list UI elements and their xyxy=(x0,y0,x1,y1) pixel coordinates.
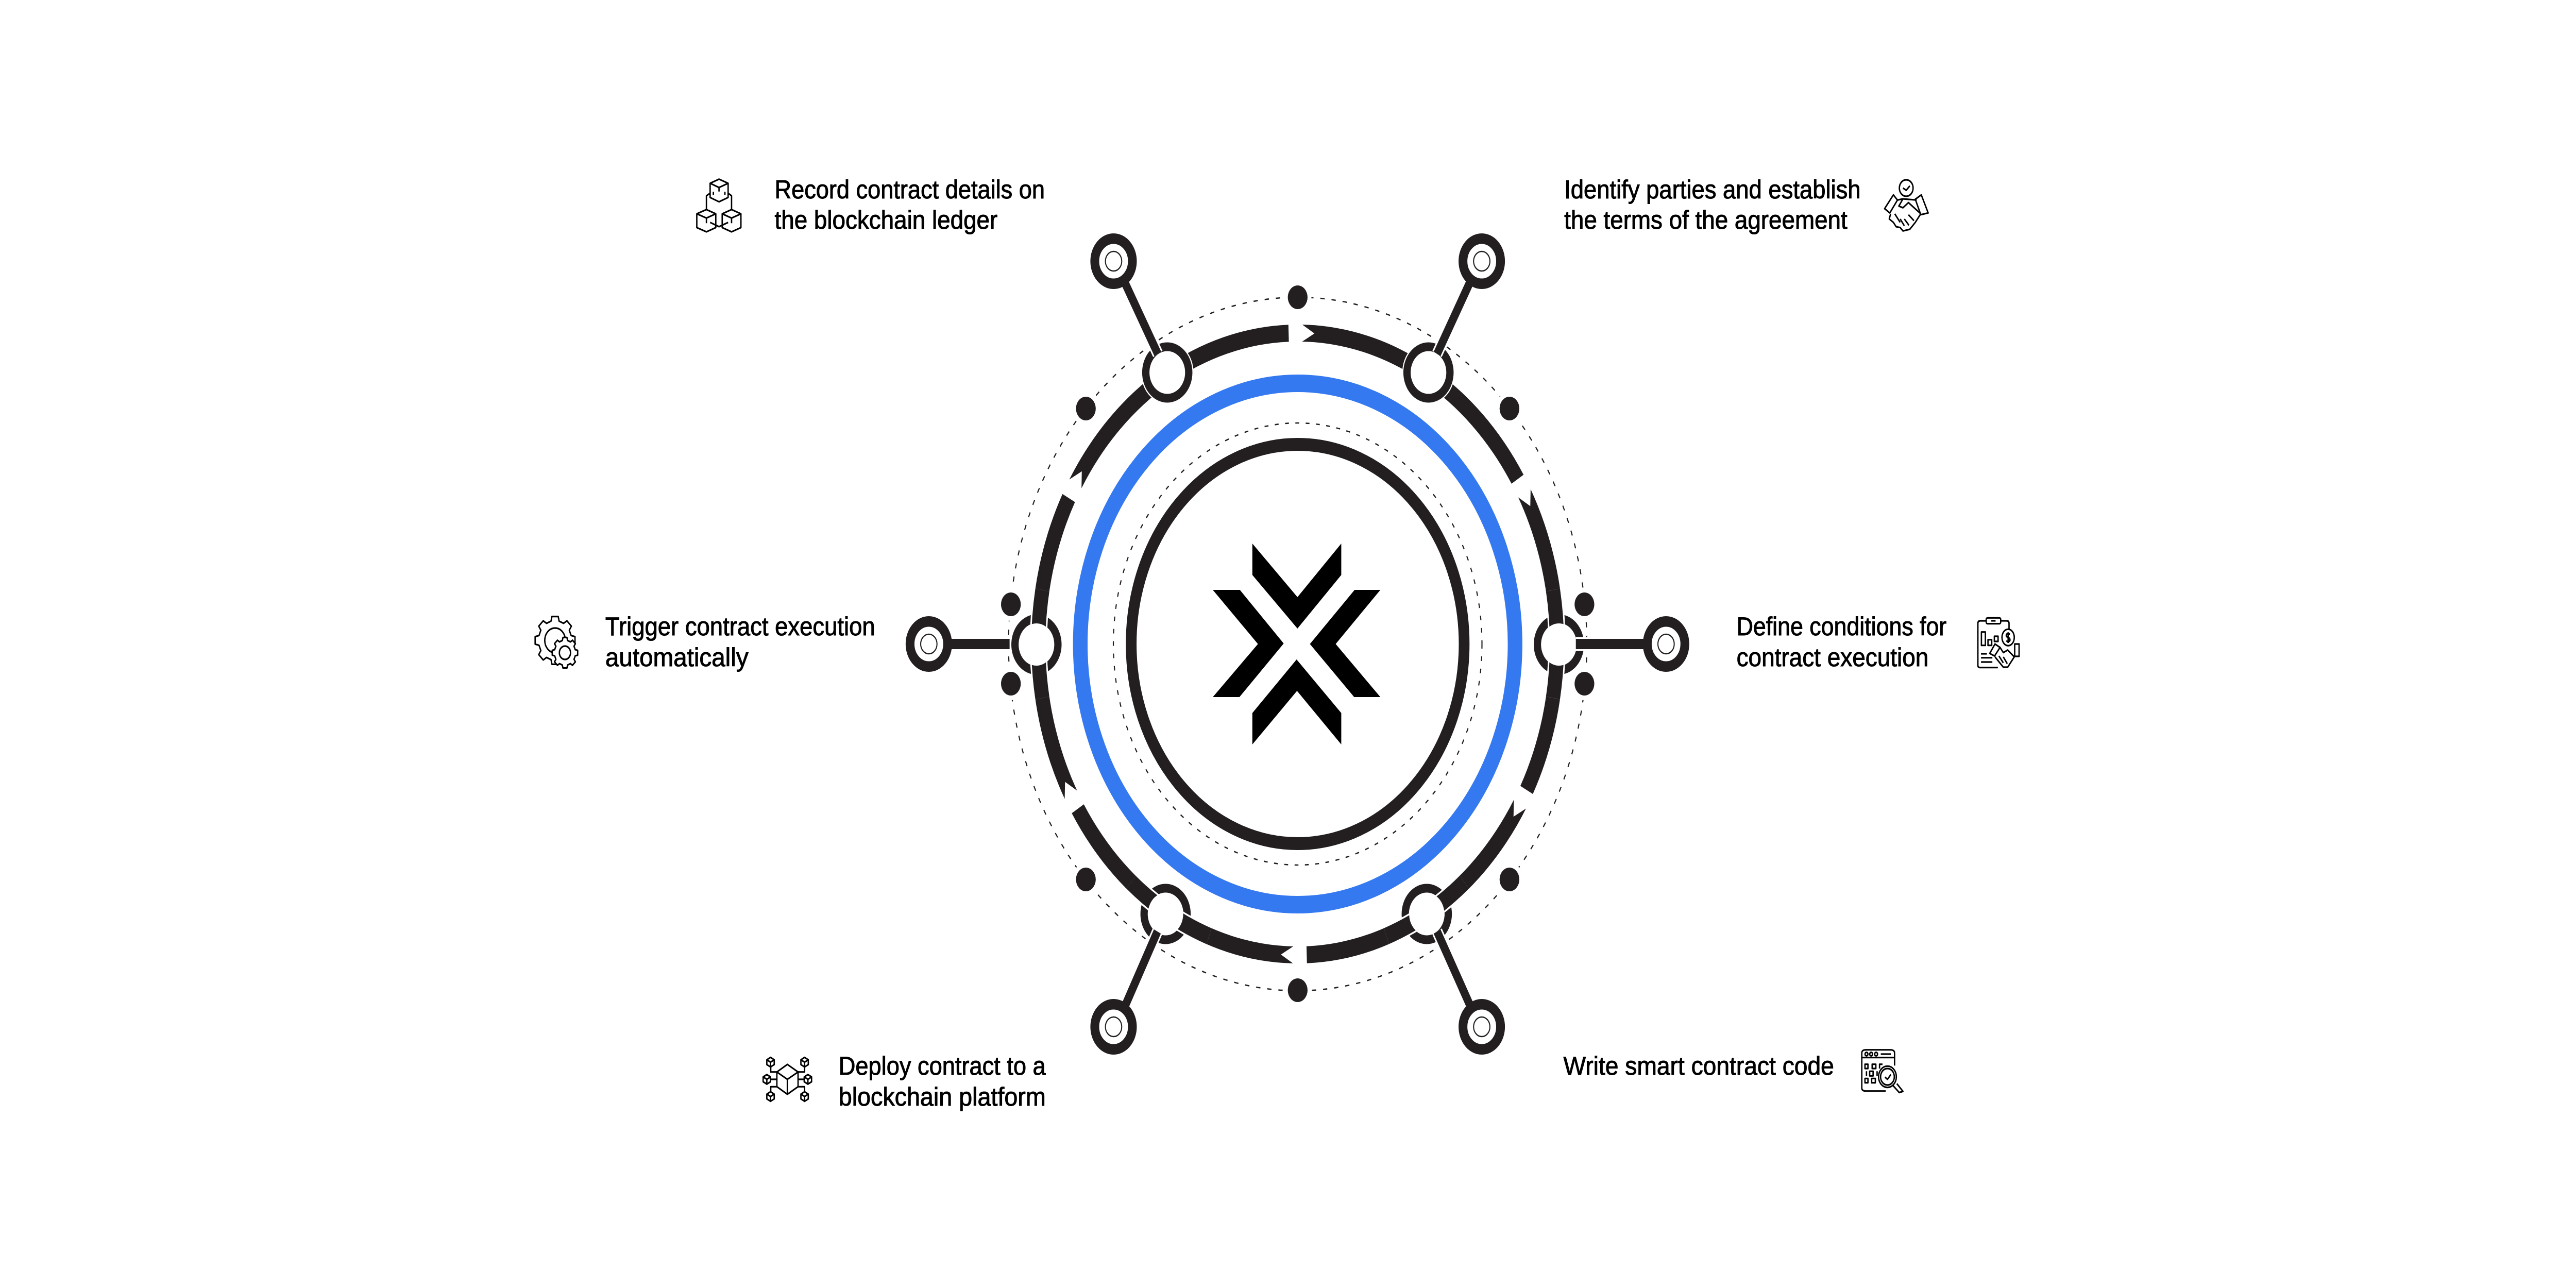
text: trigger execution: Trigger contract execution xyxy=(605,612,875,641)
text: identify parties: the terms of the agreement xyxy=(1564,205,1848,234)
inner dashed orbit xyxy=(1113,423,1482,865)
text: deploy contract: blockchain platform xyxy=(839,1082,1046,1111)
icon: network cube xyxy=(763,1057,811,1101)
icon: gears xyxy=(535,617,578,668)
icon: handshake with check xyxy=(1885,180,1928,231)
icon: code window with magnifier xyxy=(1862,1050,1903,1093)
text: deploy contract: Deploy contract to a xyxy=(839,1051,1046,1080)
outer dashed orbit with dots xyxy=(1001,285,1595,1002)
node: record contract details xyxy=(1095,239,1194,404)
node: deploy contract xyxy=(1095,882,1209,1049)
blue ring xyxy=(1080,383,1515,905)
text: define conditions xyxy=(1737,612,1946,672)
text: define conditions: Define conditions for xyxy=(1737,612,1946,641)
node: write code xyxy=(1386,882,1501,1049)
text: deploy contract xyxy=(839,1051,1046,1111)
text: define conditions: contract execution xyxy=(1737,642,1928,672)
segmented clockwise arrow ring xyxy=(954,250,1641,1038)
node: trigger execution xyxy=(910,590,1058,698)
central logo xyxy=(1213,544,1380,744)
text: trigger execution xyxy=(605,612,875,672)
text: trigger execution: automatically xyxy=(605,642,749,672)
text: record contract details xyxy=(775,175,1045,234)
text: record contract details: the blockchain ledger xyxy=(775,205,997,234)
text: identify parties xyxy=(1564,175,1861,234)
icon: stacked blocks xyxy=(697,179,741,232)
node: identify parties xyxy=(1402,239,1501,404)
text: record contract details: Record contract details on xyxy=(775,175,1045,204)
icon: clipboard with chart and handshake xyxy=(1978,618,2019,668)
central black ring xyxy=(1131,444,1464,844)
text: identify parties: Identify parties and establish xyxy=(1564,175,1861,204)
text: write code: Write smart contract code xyxy=(1564,1051,1834,1080)
node: define conditions xyxy=(1537,590,1685,698)
